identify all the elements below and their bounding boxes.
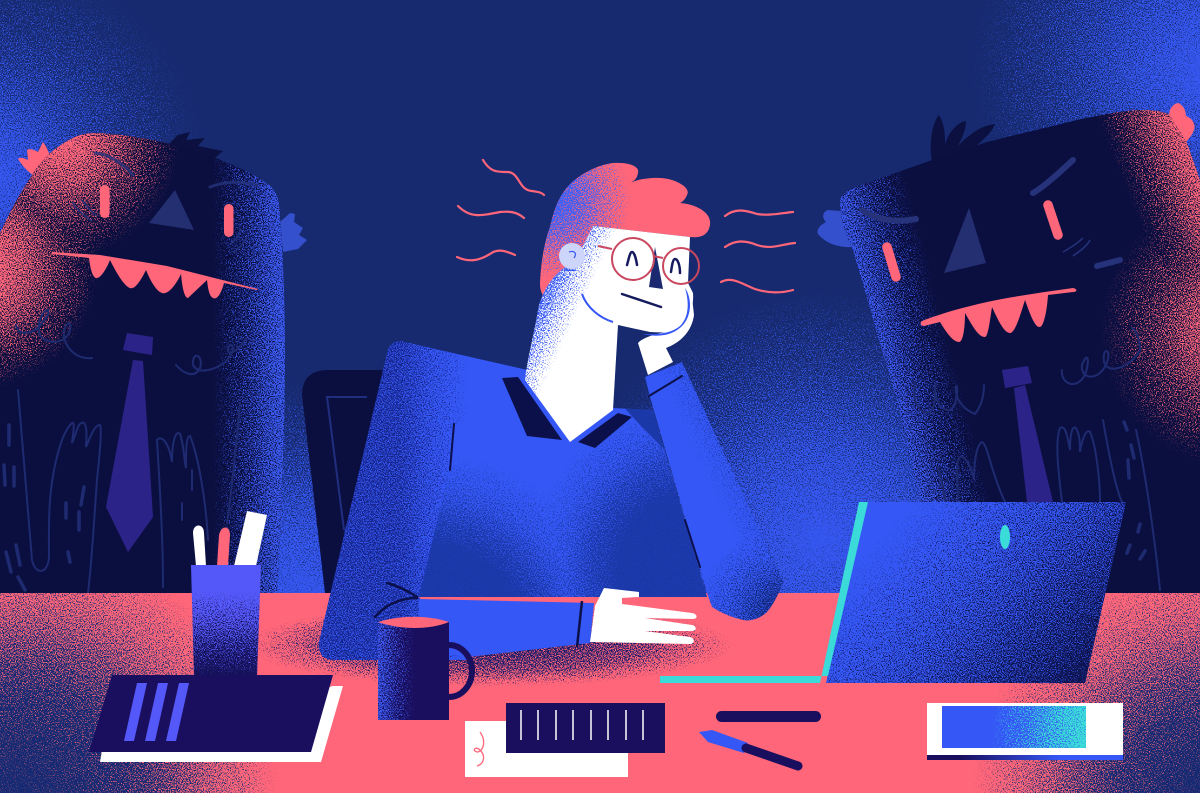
ruler bar	[716, 711, 821, 722]
pen	[699, 730, 798, 766]
right monster tie	[1002, 366, 1053, 502]
mug	[378, 617, 472, 720]
closed eyes	[627, 252, 680, 273]
keyboard	[506, 703, 665, 753]
paper note	[465, 721, 628, 777]
cheek shadow	[642, 288, 690, 336]
worker	[310, 160, 790, 665]
mug handle	[426, 645, 472, 697]
glasses	[598, 238, 699, 284]
left monster body	[0, 133, 285, 593]
office chair	[302, 370, 389, 593]
laptop	[660, 500, 1130, 685]
right monster nose	[944, 208, 986, 273]
ear	[559, 243, 585, 271]
right monster mouth and teeth	[921, 288, 1076, 342]
cup	[191, 565, 261, 675]
laptop teal edge	[660, 502, 868, 683]
left monster eyes	[100, 185, 234, 237]
smile line	[582, 294, 613, 322]
desk	[0, 593, 1200, 793]
left monster crown tuft	[18, 142, 52, 178]
laptop screen	[820, 500, 1130, 685]
left monster brows	[95, 153, 257, 187]
chair seam line	[327, 397, 367, 530]
right monster	[817, 100, 1200, 600]
left monster hair	[167, 132, 223, 158]
mug body	[378, 620, 449, 720]
hair	[540, 162, 710, 295]
right monster top ear	[1169, 103, 1195, 145]
stress lines left	[457, 160, 544, 260]
right monster line details	[914, 328, 1160, 590]
shoulder and arm creases	[450, 424, 700, 567]
right monster brows	[862, 160, 1120, 266]
notebook stripes	[124, 683, 189, 741]
right hand	[638, 297, 694, 375]
tablet box	[927, 703, 1123, 760]
left cuff line	[577, 601, 582, 647]
desk shadow left	[0, 593, 1200, 793]
pencil holder	[191, 511, 267, 675]
left monster	[0, 132, 307, 593]
right monster side ear	[817, 210, 855, 247]
collar	[502, 377, 632, 448]
left hand	[590, 588, 697, 644]
right arm	[645, 362, 783, 620]
right monster hair	[931, 115, 995, 165]
right monster eyes	[887, 205, 1058, 277]
desk shadow right	[0, 593, 1200, 793]
mouth	[622, 294, 661, 307]
left monster tie	[106, 333, 153, 552]
face and neck	[520, 225, 700, 445]
left monster fur dashes	[4, 425, 84, 590]
left sleeve	[318, 341, 526, 660]
right cuff line	[649, 376, 682, 396]
forearm on desk	[419, 599, 594, 657]
nose	[649, 247, 663, 289]
mug coffee	[378, 617, 449, 628]
right monster eye lines	[1063, 238, 1090, 256]
shadow under worker	[0, 593, 1200, 793]
left monster mouth and teeth	[52, 252, 258, 298]
torso	[400, 340, 720, 600]
laptop camera	[1000, 525, 1010, 549]
left monster eye lines	[72, 200, 247, 252]
right monster body	[820, 100, 1200, 600]
stress lines right	[721, 210, 795, 292]
pens	[193, 511, 267, 566]
left monster line details	[16, 310, 246, 593]
left monster nose	[149, 190, 194, 230]
right monster fur dashes	[1124, 422, 1145, 559]
elbow creases	[375, 583, 417, 617]
notebook	[89, 675, 343, 762]
left monster ear	[280, 213, 307, 252]
